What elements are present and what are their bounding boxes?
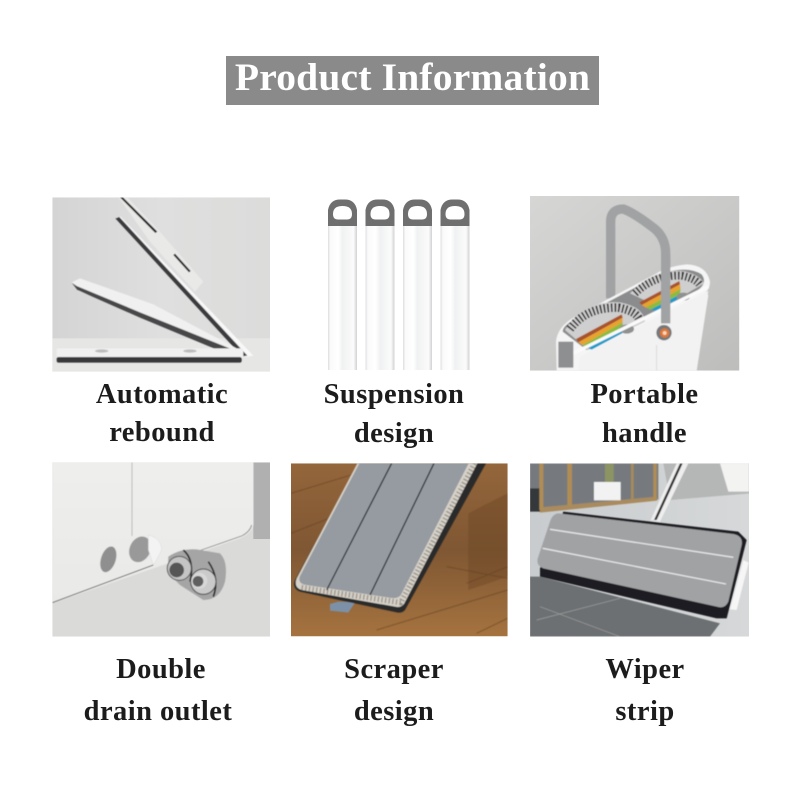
- label: Double: [116, 654, 206, 685]
- label: [590, 379, 699, 449]
- panel: automatic rebound: [52, 197, 270, 448]
- label: Scraper: [344, 654, 444, 685]
- label: [84, 654, 232, 727]
- label: [605, 654, 685, 727]
- label: Suspension: [324, 379, 464, 410]
- label: Wiper: [605, 654, 685, 685]
- panel: suspension design: [324, 200, 470, 449]
- label: drain outlet: [84, 696, 232, 727]
- image: mop plate folding: [52, 197, 270, 372]
- label: design: [354, 696, 434, 727]
- panel: double drain outlet: [52, 462, 270, 727]
- panel: wiper strip: [530, 463, 750, 727]
- label: handle: [602, 418, 687, 449]
- label: design: [354, 418, 434, 449]
- panel: portable handle: [530, 196, 739, 449]
- panel: scraper design: [291, 463, 508, 727]
- label: Portable: [590, 379, 699, 410]
- label: Automatic: [96, 379, 228, 410]
- image: drain outlets: [52, 462, 270, 637]
- label: [96, 379, 228, 448]
- title: Product Information: [235, 55, 590, 99]
- image: mop pad on wood floor: [291, 463, 508, 636]
- image: bucket with handle: [530, 196, 739, 371]
- label: [324, 379, 464, 449]
- label: rebound: [109, 417, 215, 448]
- image: four handles: [328, 200, 470, 370]
- label: strip: [615, 696, 675, 727]
- label: [344, 654, 444, 727]
- image: flat mop on tiled floor: [530, 463, 750, 637]
